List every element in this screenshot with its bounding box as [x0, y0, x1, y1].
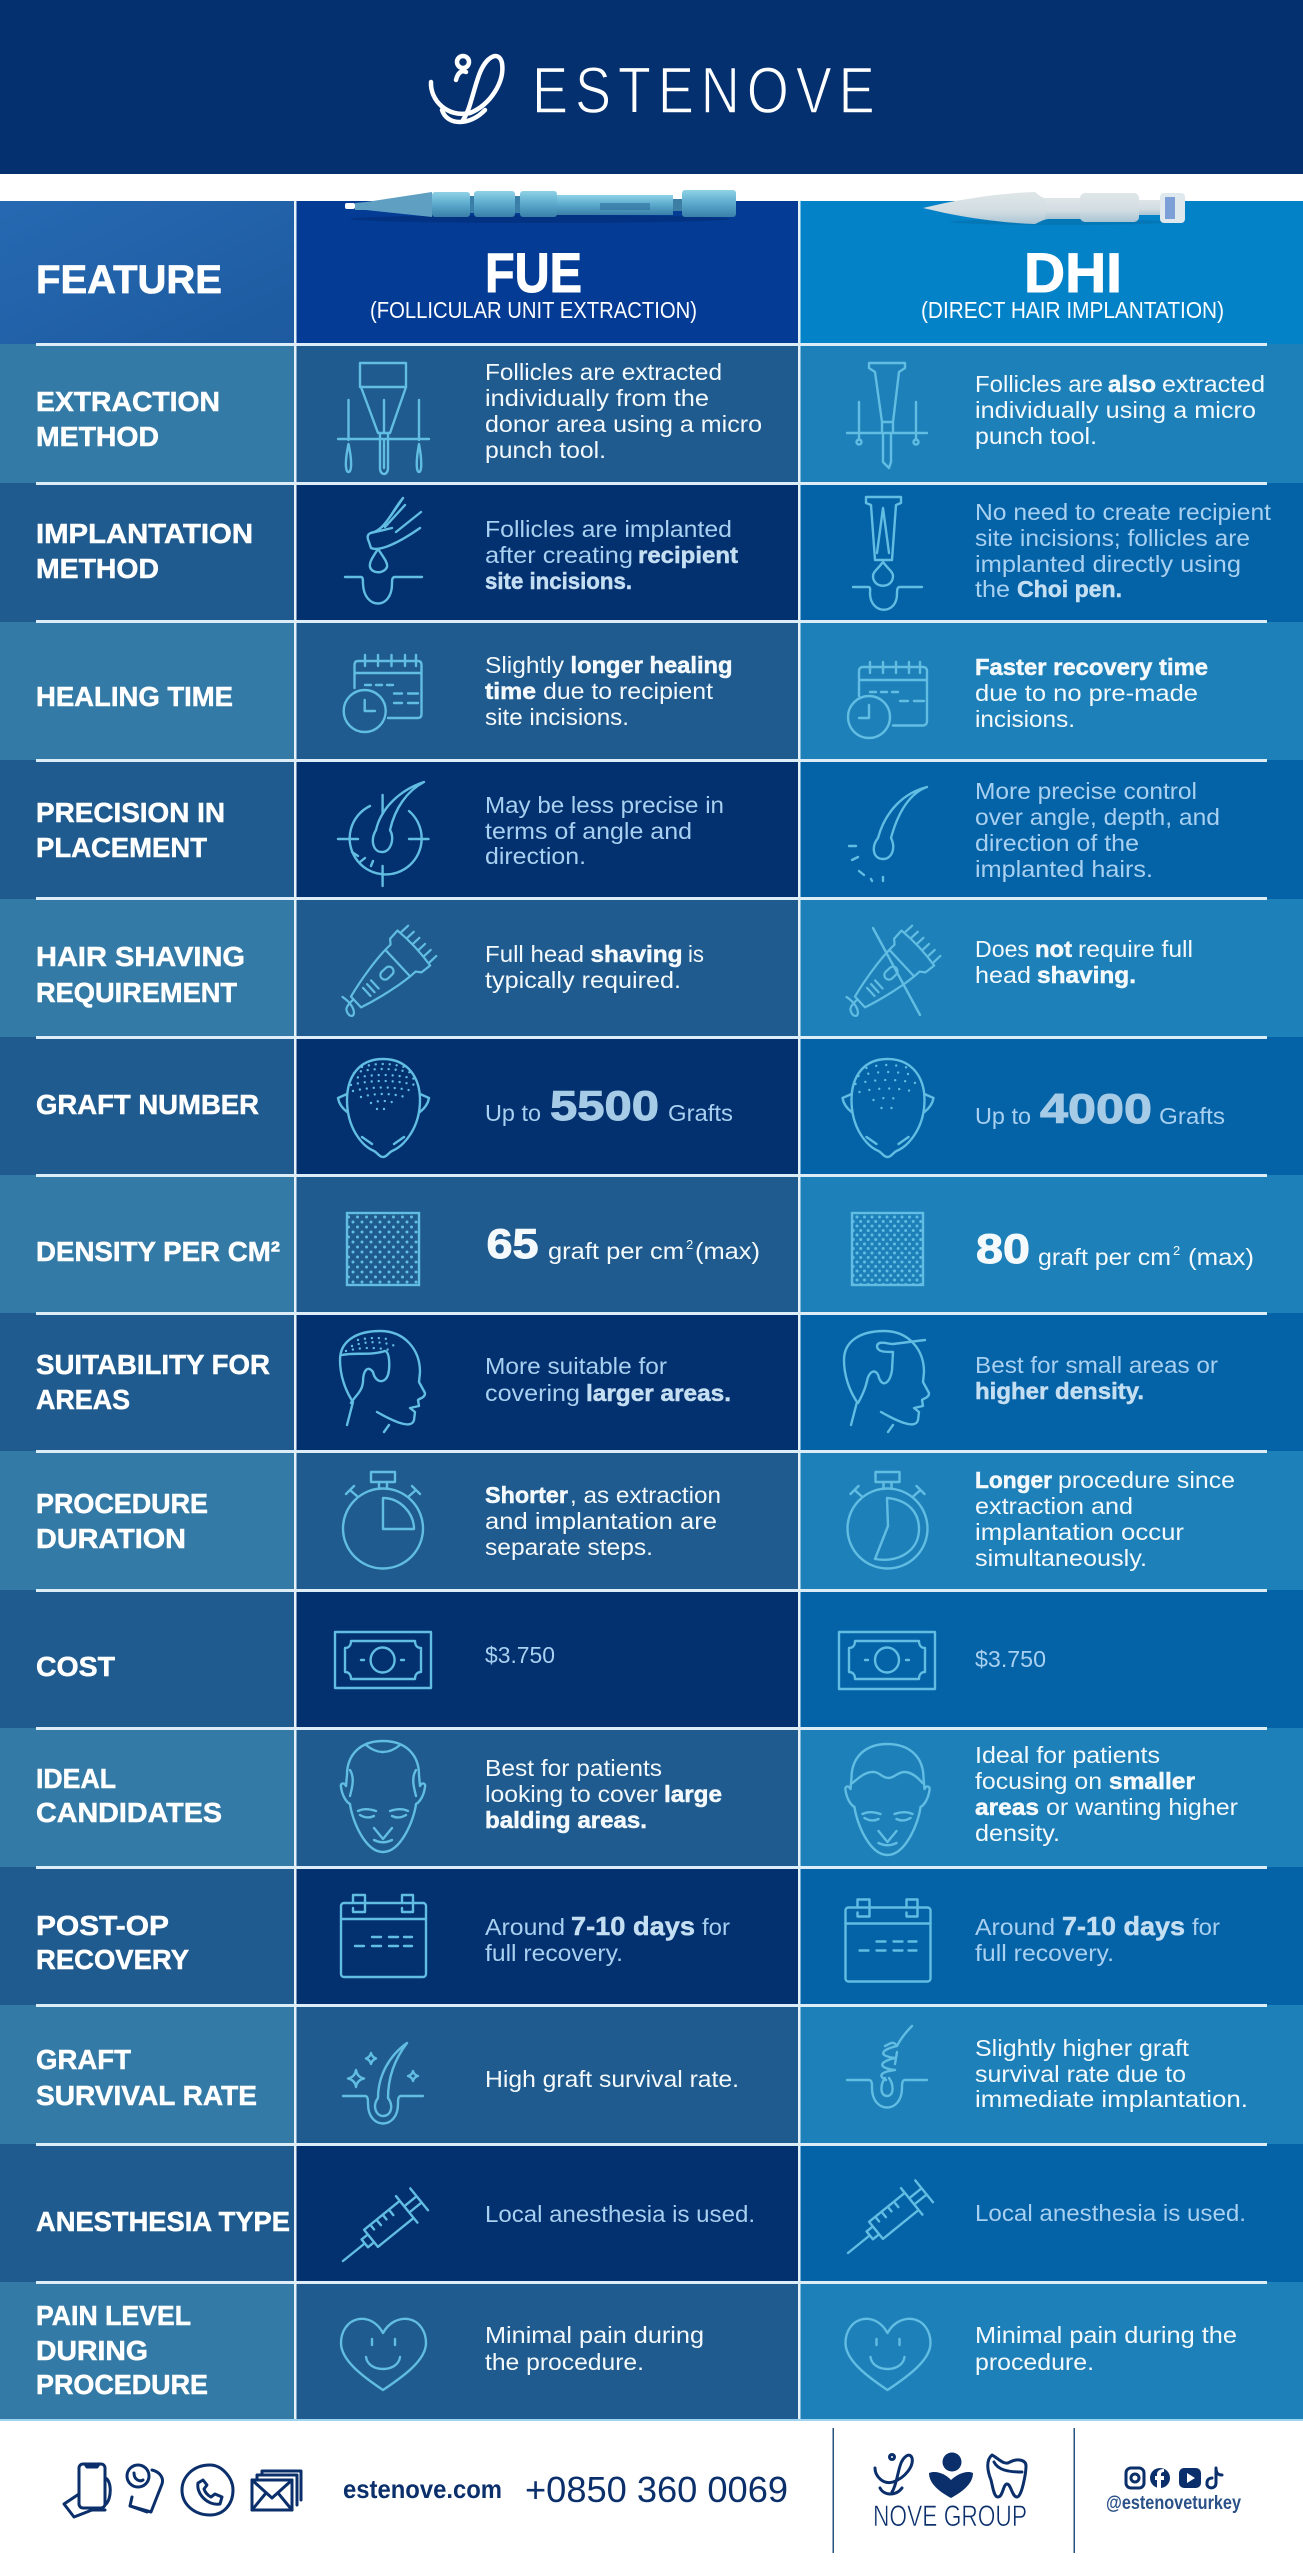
FUE text: balding areas. — [485, 1807, 647, 1833]
icon: FUE stopwatch — [343, 1472, 423, 1568]
DHI text: Longer — [975, 1467, 1052, 1493]
footer dividers — [832, 2428, 1075, 2553]
label: IDEAL — [36, 1763, 116, 1794]
heading: FUE: (FOLLICULAR UNIT EXTRACTION) — [370, 297, 697, 323]
DHI text: focusing on — [975, 1768, 1102, 1794]
website: estenove.com — [343, 2474, 502, 2504]
icon: FUE hair sparkles — [343, 2043, 423, 2124]
FUE text: Shorter — [485, 1482, 568, 1508]
icon: DHI implant — [853, 497, 922, 610]
icon: FUE head profile — [340, 1331, 425, 1432]
DHI text: Minimal pain during the — [975, 2322, 1237, 2348]
icon: FUE punch — [338, 363, 429, 474]
label: PROCEDURE — [36, 1488, 208, 1519]
FUE text: for — [702, 1914, 730, 1940]
label: DENSITY PER CM² — [36, 1236, 280, 1267]
label: METHOD — [36, 421, 159, 452]
label — [36, 1349, 270, 1415]
logo: Nove group: NOVE GROUP — [873, 2500, 1027, 2533]
row 12: post-op recovery — [0, 1867, 1303, 2005]
FUE text: Local anesthesia is used. — [485, 2201, 755, 2227]
label: RECOVERY — [36, 1944, 189, 1975]
DHI text: survival rate due to — [975, 2061, 1186, 2087]
DHI text: not — [1035, 936, 1072, 962]
DHI text: head — [975, 962, 1031, 988]
label: ANESTHESIA TYPE — [36, 2206, 290, 2237]
label — [36, 1763, 222, 1828]
DHI text: full recovery. — [975, 1940, 1114, 1966]
DHI text: the — [975, 576, 1010, 602]
FUE text: More suitable for — [485, 1353, 667, 1379]
FUE text: Best for patients — [485, 1755, 662, 1781]
DHI text — [975, 1911, 1220, 1966]
phone number: +0850 360 0069 — [525, 2469, 788, 2510]
DHI number text: Up to — [975, 1103, 1031, 1129]
DHI text: Around — [975, 1914, 1055, 1940]
DHI text: over angle, depth, and — [975, 804, 1220, 830]
FUE text: time — [485, 678, 536, 704]
DHI text: Does — [975, 936, 1029, 962]
DHI text — [975, 1352, 1218, 1404]
FUE number text — [485, 1082, 733, 1129]
FUE text — [485, 1482, 721, 1560]
FUE text — [485, 1755, 722, 1833]
FUE text: typically required. — [485, 967, 681, 993]
icon: DHI twisted hair — [847, 2026, 927, 2108]
label: METHOD — [36, 553, 159, 584]
icon: DHI smiling heart — [846, 2319, 930, 2390]
DHI text: higher density. — [975, 1378, 1144, 1404]
DHI text: No need to create recipient — [975, 499, 1272, 525]
DHI text: immediate implantation. — [975, 2086, 1248, 2112]
label: POST-OP — [36, 1910, 169, 1941]
FUE text: the procedure. — [485, 2349, 644, 2375]
FUE text: terms of angle and — [485, 818, 692, 844]
DHI text: procedure. — [975, 2349, 1094, 2375]
row 5: hair shaving requirement — [0, 899, 1303, 1037]
FUE text: shaving — [590, 941, 682, 967]
icon: DHI banknote — [839, 1632, 935, 1689]
FUE text: site incisions. — [485, 704, 629, 730]
FUE density text — [486, 1220, 760, 1267]
label: DURATION — [36, 1523, 186, 1554]
DHI text: or wanting higher — [1046, 1794, 1238, 1820]
label: PROCEDURE — [36, 2369, 208, 2400]
DHI number text: 4000 — [1040, 1085, 1152, 1132]
FUE text — [485, 359, 762, 463]
DHI text: require full — [1078, 936, 1193, 962]
DHI text — [975, 654, 1208, 732]
FUE text: Follicles are implanted — [485, 516, 732, 542]
DHI text: extraction and — [975, 1493, 1133, 1519]
FUE number text: Grafts — [668, 1100, 733, 1126]
icon: telephone circle — [182, 2465, 233, 2515]
top brand band — [0, 0, 1303, 174]
DHI text: Choi pen. — [1017, 576, 1122, 602]
icon: phone with chat — [127, 2465, 163, 2512]
DHI text: Ideal for patients — [975, 1742, 1160, 1768]
icon: FUE density square — [347, 1213, 419, 1285]
row 4: precision in placement — [0, 760, 1303, 899]
label: PRECISION IN — [36, 797, 225, 828]
icon: DHI stopwatch — [848, 1472, 928, 1568]
FUE cost: $3.750 — [485, 1642, 555, 1668]
FUE text — [485, 792, 724, 869]
label: COST — [36, 1651, 115, 1682]
DHI text — [975, 2322, 1237, 2375]
FUE text — [485, 1353, 731, 1406]
FUE text: , as extraction — [570, 1482, 721, 1508]
row 9: procedure duration — [0, 1451, 1303, 1590]
FUE text: and implantation are — [485, 1508, 717, 1534]
label — [36, 518, 253, 584]
label — [36, 797, 225, 863]
label: PLACEMENT — [36, 832, 207, 863]
DHI text: also — [1108, 371, 1156, 397]
FUE text: Minimal pain during — [485, 2322, 704, 2348]
icon: FUE smiling heart — [341, 2319, 426, 2390]
table header row — [0, 201, 1303, 344]
DHI density text: 2 — [1173, 1243, 1180, 1258]
DHI text: smaller — [1109, 1768, 1195, 1794]
label: PAIN LEVEL — [36, 2300, 191, 2331]
DHI text: Faster recovery time — [975, 654, 1208, 680]
FUE text: looking to cover — [485, 1781, 658, 1807]
row 13: graft survival rate — [0, 2005, 1303, 2144]
icon: FUE syringe — [332, 2186, 430, 2274]
row 3: healing time — [0, 622, 1303, 760]
heading: DHI: DHI — [1024, 241, 1122, 304]
row 15: pain level during procedure — [0, 2282, 1303, 2420]
FUE text: is — [688, 941, 704, 967]
row 1: extraction method — [0, 344, 1303, 483]
DHI text: shaving. — [1037, 962, 1136, 988]
label: HEALING TIME — [36, 681, 233, 712]
FUE density text: 2 — [686, 1237, 693, 1252]
FUE text: longer healing — [570, 652, 732, 678]
row 2: implantation method — [0, 483, 1303, 622]
DHI text: for — [1192, 1914, 1220, 1940]
FUE text — [485, 941, 704, 993]
row 6: graft number — [0, 1037, 1303, 1175]
DHI text: procedure since — [1058, 1467, 1235, 1493]
DHI text — [975, 778, 1220, 882]
white strip under band — [0, 174, 1303, 201]
DHI text — [975, 2035, 1248, 2112]
DHI text — [975, 1467, 1235, 1571]
FUE text: due to recipient — [543, 678, 714, 704]
DHI density text: (max) — [1188, 1244, 1254, 1270]
label: CANDIDATES — [36, 1797, 222, 1828]
DHI text: Local anesthesia is used. — [975, 2200, 1246, 2226]
DHI text: extracted — [1162, 371, 1265, 397]
label: DURING — [36, 2335, 148, 2366]
FUE text: after creating — [485, 542, 633, 568]
icon: FUE face balding — [341, 1741, 425, 1852]
icon: DHI calendar — [846, 1900, 930, 1982]
FUE text: covering — [485, 1380, 580, 1406]
icon: FUE calendar clock — [344, 655, 422, 732]
DHI density text: 80 — [976, 1225, 1030, 1272]
label: EXTRACTION — [36, 386, 220, 417]
DHI text: Best for small areas or — [975, 1352, 1218, 1378]
icon: DHI clipper crossed — [834, 923, 942, 1029]
FUE density text: 65 — [486, 1220, 538, 1267]
FUE text: punch tool. — [485, 437, 606, 463]
FUE text: separate steps. — [485, 1534, 653, 1560]
icon: FUE banknote — [335, 1632, 431, 1688]
social handle: @estenoveturkey — [1106, 2493, 1241, 2514]
icon: DHI head top — [842, 1059, 934, 1157]
FUE text — [485, 1911, 730, 1966]
FUE text: direction. — [485, 843, 586, 869]
FUE text — [485, 2322, 704, 2375]
label — [36, 2044, 257, 2111]
FUE text: Slightly — [485, 652, 565, 678]
DHI text: incisions. — [975, 706, 1075, 732]
icon: envelope stack — [252, 2471, 301, 2510]
DHI text — [975, 499, 1272, 602]
FUE text: individually from the — [485, 385, 709, 411]
DHI text: implanted hairs. — [975, 856, 1153, 882]
label — [36, 386, 220, 452]
label — [36, 941, 245, 1008]
FUE density text: (max) — [695, 1238, 760, 1264]
FUE text: 7-10 days — [571, 1911, 695, 1941]
label — [36, 1488, 208, 1554]
row 8: suitability for areas — [0, 1313, 1303, 1451]
FUE number text: 5500 — [550, 1082, 659, 1129]
heading: DHI: (DIRECT HAIR IMPLANTATION) — [921, 297, 1224, 323]
DHI text: Follicles are — [975, 371, 1103, 397]
row 7: density per cm2 — [0, 1175, 1303, 1313]
FUE text: Full head — [485, 941, 584, 967]
logo: Nove group — [873, 2452, 1027, 2533]
DHI text: individually using a micro — [975, 397, 1256, 423]
icon: DHI syringe — [837, 2178, 935, 2266]
FUE text: donor area using a micro — [485, 411, 762, 437]
DHI text: site incisions; follicles are — [975, 525, 1250, 551]
icon: FUE calendar — [341, 1895, 426, 1977]
DHI Choi pen image — [923, 192, 1185, 225]
FUE density text: graft per cm — [548, 1238, 684, 1264]
DHI number text: Grafts — [1159, 1103, 1225, 1129]
footer — [0, 2421, 1303, 2560]
DHI text: implantation occur — [975, 1519, 1184, 1545]
label: IMPLANTATION — [36, 518, 253, 549]
DHI text — [975, 936, 1193, 988]
FUE punch pen image — [345, 190, 736, 223]
heading: FUE: FUE — [485, 241, 582, 304]
DHI cost: $3.750 — [975, 1646, 1046, 1672]
label: SUITABILITY FOR — [36, 1349, 270, 1380]
FUE text — [485, 652, 732, 730]
icon: FUE clipper — [330, 923, 438, 1029]
row 11: ideal candidates — [0, 1728, 1303, 1867]
DHI text — [975, 371, 1265, 449]
DHI text: implanted directly using — [975, 551, 1241, 577]
icon: DHI density square — [852, 1213, 923, 1285]
icon: DHI punch — [847, 363, 927, 468]
DHI text: areas — [975, 1794, 1039, 1820]
FUE text — [485, 516, 738, 594]
icon: DHI head profile — [844, 1331, 929, 1432]
heading: DHI — [921, 241, 1224, 323]
DHI text: density. — [975, 1820, 1060, 1846]
DHI number text — [975, 1085, 1225, 1132]
social icons — [1126, 2468, 1222, 2488]
label: GRAFT NUMBER — [36, 1089, 259, 1120]
DHI density text — [976, 1225, 1254, 1272]
FUE text: site incisions. — [485, 568, 632, 594]
label — [36, 2300, 208, 2400]
FUE text: High graft survival rate. — [485, 2066, 739, 2092]
DHI text: direction of the — [975, 830, 1139, 856]
label: AREAS — [36, 1384, 130, 1415]
FUE text: May be less precise in — [485, 792, 724, 818]
icon: DHI face with hair — [845, 1744, 930, 1855]
FUE number text: Up to — [485, 1100, 541, 1126]
label: GRAFT — [36, 2044, 131, 2075]
icon: DHI hair — [849, 787, 927, 881]
DHI text: More precise control — [975, 778, 1197, 804]
DHI text: punch tool. — [975, 423, 1097, 449]
FUE text: full recovery. — [485, 1940, 623, 1966]
FUE text: large — [664, 1781, 722, 1807]
icon: FUE hair target — [338, 782, 428, 886]
label: SURVIVAL RATE — [36, 2080, 257, 2111]
FUE text: recipient — [638, 542, 738, 568]
DHI text: 7-10 days — [1062, 1911, 1185, 1941]
label: REQUIREMENT — [36, 977, 237, 1008]
DHI density text: graft per cm — [1038, 1244, 1171, 1270]
FUE text: Follicles are extracted — [485, 359, 722, 385]
row 10: cost — [0, 1590, 1303, 1728]
label — [36, 1910, 189, 1975]
FUE text: larger areas. — [586, 1380, 731, 1406]
label: HAIR SHAVING — [36, 941, 245, 972]
heading: feature: FEATURE — [36, 258, 222, 302]
heading: FUE — [370, 241, 697, 323]
DHI text — [975, 1742, 1238, 1846]
DHI text: simultaneously. — [975, 1545, 1147, 1571]
logo: Estenove: ESTENOVE — [532, 53, 875, 127]
FUE text: Around — [485, 1914, 565, 1940]
icon: FUE implant — [345, 498, 422, 604]
icon: DHI calendar clock — [848, 662, 927, 738]
icon: FUE head top — [338, 1059, 429, 1157]
icon: hand holding phone — [64, 2464, 110, 2517]
row 14: anesthesia type — [0, 2144, 1303, 2282]
DHI text: Slightly higher graft — [975, 2035, 1190, 2061]
DHI text: due to no pre-made — [975, 680, 1198, 706]
